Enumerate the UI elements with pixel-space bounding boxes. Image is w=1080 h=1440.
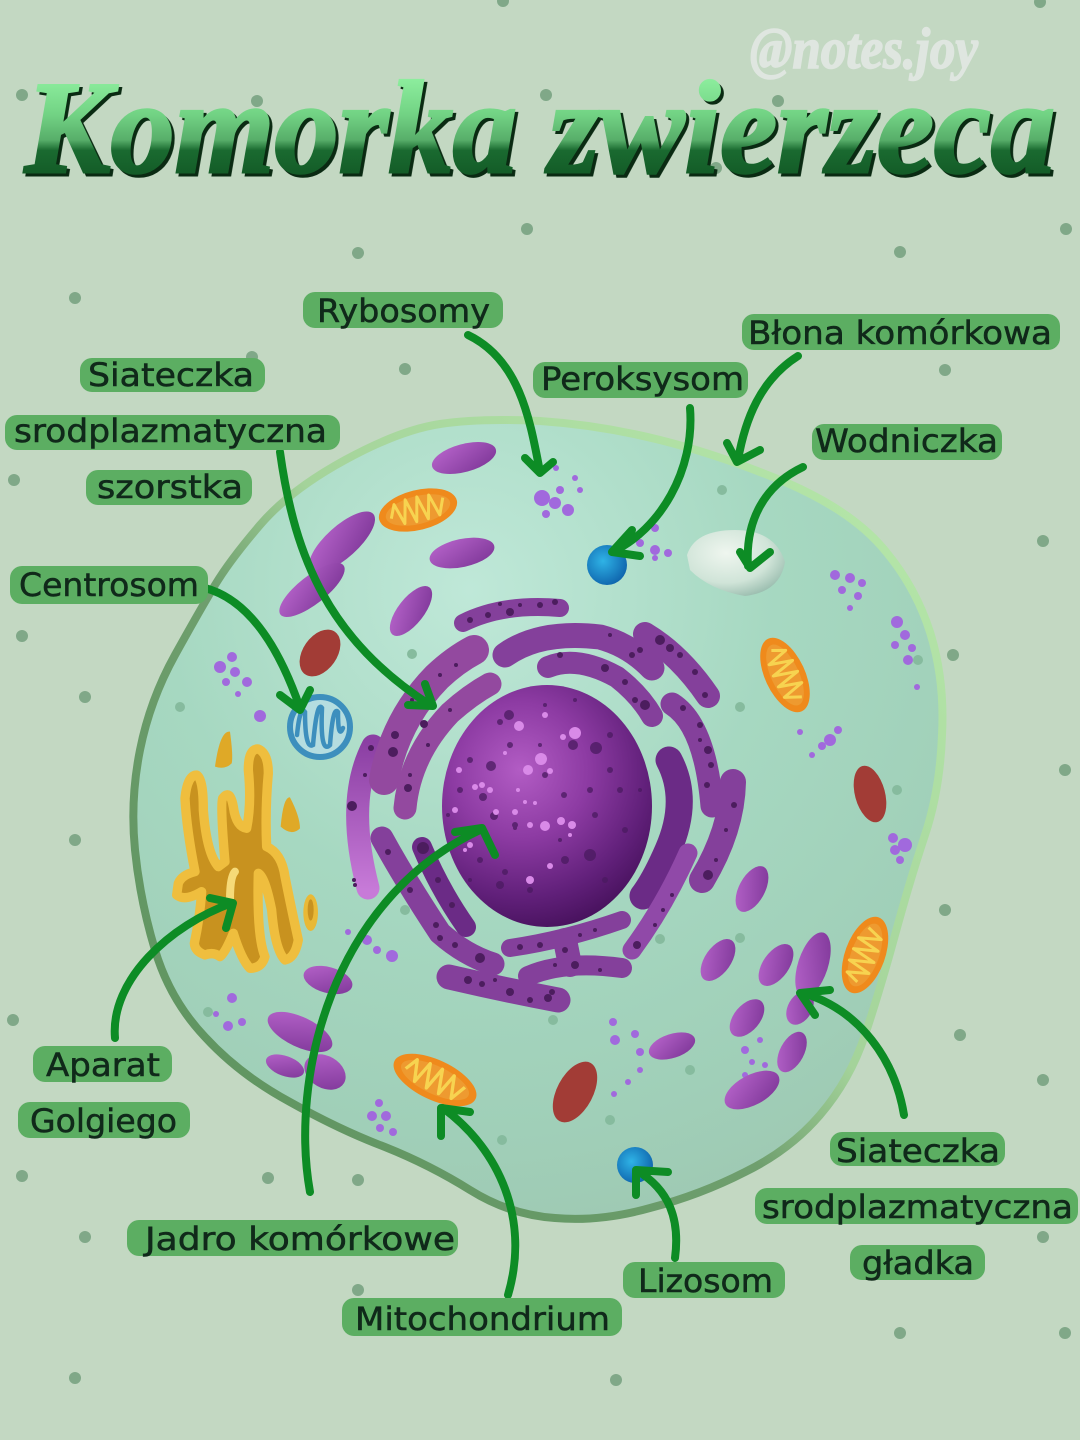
- label: Siateczka srodplazmatyczna szorstka: szorstka: [97, 468, 243, 506]
- label: Aparat Golgiego: Golgiego: [30, 1102, 177, 1140]
- arrow: Centrosom: [205, 588, 310, 710]
- label: Lizosom: Lizosom: [638, 1262, 773, 1300]
- cell membrane and cytoplasm: [133, 420, 943, 1219]
- smooth endoplasmic reticulum: [262, 436, 838, 1117]
- label: Aparat Golgiego: Aparat: [46, 1046, 160, 1084]
- label: Wodniczka: Wodniczka: [815, 422, 998, 460]
- arrow: Peroksysom: [612, 408, 690, 556]
- title: Komorka zwierzeca: [24, 55, 1055, 201]
- arrow: Rybosomy: [468, 335, 553, 473]
- label: Siateczka srodplazmatyczna gładka: srodplazmatyczna: [762, 1188, 1073, 1226]
- arrow: Jadro komórkowe: [305, 828, 495, 1192]
- label: Aparat Golgiego: [18, 1046, 190, 1140]
- watermark: @notes.joy: [750, 16, 978, 81]
- label: Peroksysom: Peroksysom: [541, 360, 744, 398]
- nucleus dark speckles: [446, 698, 642, 893]
- cell: [133, 420, 943, 1219]
- golgi apparatus: [177, 732, 318, 968]
- nucleus light speckles: [452, 712, 581, 884]
- label: Siateczka srodplazmatyczna gładka: gładka: [862, 1244, 974, 1282]
- arrow: Lizosom: [636, 1170, 676, 1258]
- arrow: Siateczka gładka: [800, 990, 904, 1115]
- arrow: Błona komórkowa: [727, 356, 798, 462]
- label: Rybosomy: Rybosomy: [317, 292, 490, 330]
- nucleus: [442, 685, 652, 927]
- faint cytoplasm dots: [175, 485, 923, 1145]
- label: Siateczka srodplazmatyczna szorstka: Siateczka: [88, 356, 254, 394]
- centrosome: [290, 697, 350, 757]
- red organelles: [291, 622, 892, 1130]
- free ribosome dots: [213, 465, 920, 1136]
- label: Siateczka srodplazmatyczna szorstka: srodplazmatyczna: [14, 412, 327, 450]
- mitochondria: [374, 481, 897, 1117]
- label: Siateczka srodplazmatyczna gładka: [755, 1132, 1078, 1282]
- label: Mitochondrium: Mitochondrium: [355, 1300, 610, 1338]
- label: Siateczka srodplazmatyczna szorstka: [5, 356, 340, 506]
- vacuole: [687, 530, 785, 596]
- arrow: Aparat Golgiego: [115, 898, 233, 1038]
- label: Błona komórkowa: Błona komórkowa: [748, 314, 1052, 352]
- label: Centrosom: Centrosom: [19, 566, 199, 604]
- label: Siateczka srodplazmatyczna gładka: Siateczka: [836, 1132, 1000, 1170]
- label: Jadro komórkowe: Jadro komórkowe: [143, 1220, 455, 1258]
- arrow: Mitochondrium: [441, 1108, 515, 1295]
- lysosomes / peroxisome: [587, 545, 653, 1183]
- rough endoplasmic reticulum: [347, 599, 737, 1003]
- rough ER ribosome speckles: [347, 599, 737, 1003]
- arrow: Siateczka szorstka: [280, 452, 433, 706]
- arrow: Wodniczka: [740, 467, 803, 568]
